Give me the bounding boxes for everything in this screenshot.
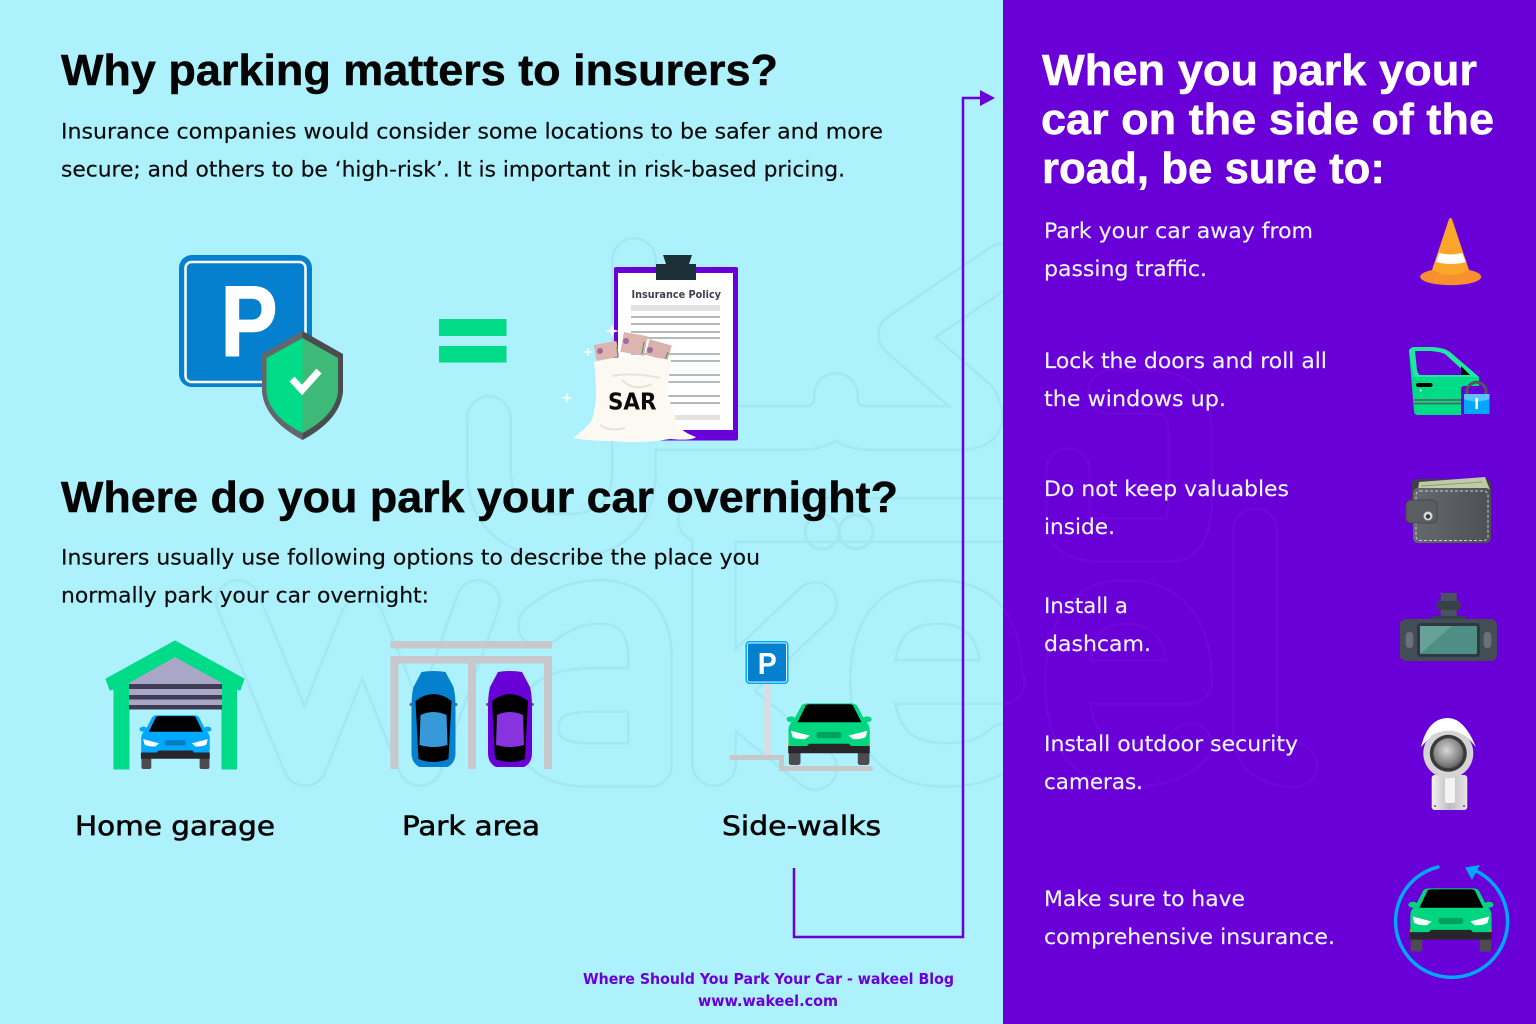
text block: overnight options: normally park your car overnight: (61, 584, 429, 608)
tip: dashcam: dashcam. (1044, 632, 1151, 657)
icon: side-walk parking with sign and green car (732, 641, 872, 768)
tip: no valuables: inside. (1044, 515, 1115, 540)
tip: lock doors: Lock the doors and roll all (1044, 349, 1327, 374)
tip: comprehensive insurance: Make sure to have (1044, 887, 1245, 912)
label: home garage: Home garage (75, 811, 275, 842)
icon: equals sign (439, 319, 506, 362)
footer credit (583, 970, 954, 1010)
icon: parking sign with shield: P (220, 266, 278, 378)
heading: when you park on the side of the road: road, be sure to: (1042, 144, 1385, 193)
left panel background (0, 0, 1003, 1024)
icon: outdoor security camera (1421, 718, 1476, 810)
heading: when you park on the side of the road: When you park your (1042, 46, 1477, 95)
tip: lock doors: the windows up. (1044, 387, 1226, 412)
icon: traffic cone (1420, 218, 1481, 285)
tip: no valuables: Do not keep valuables (1044, 477, 1289, 502)
arrow: from side-walks to right panel (794, 90, 995, 937)
label: side-walks: Side-walks (722, 811, 881, 842)
icon: insurance policy clipboard and SAR money bag (561, 255, 738, 442)
tip: security cameras (1044, 732, 1298, 795)
tip: security cameras: Install outdoor security (1044, 732, 1298, 757)
tip: lock doors (1044, 349, 1327, 412)
icon: green car inside circular arrow (1396, 865, 1508, 977)
icon: park area with two cars (390, 641, 552, 769)
tip: dashcam: Install a (1044, 594, 1128, 619)
tip: security cameras: cameras. (1044, 770, 1143, 795)
tip: park away from traffic: Park your car away from (1044, 219, 1313, 244)
tip: no valuables (1044, 477, 1289, 540)
heading: when you park on the side of the road (1041, 46, 1494, 193)
heading: where do you park: Where do you park your car overnight? (61, 473, 898, 522)
tip: park away from traffic (1044, 219, 1313, 282)
tip: comprehensive insurance (1044, 887, 1335, 950)
text block: overnight options: Insurers usually use following options to describe the place you (61, 546, 760, 570)
icon: car door with padlock (1409, 347, 1490, 416)
icon: home garage with blue car (106, 641, 244, 769)
tip: dashcam (1044, 594, 1151, 657)
footer credit: Where Should You Park Your Car - wakeel Blog (583, 970, 954, 988)
icon: wallet (1406, 477, 1491, 543)
text block: overnight options (61, 546, 760, 608)
heading: when you park on the side of the road: car on the side of the (1041, 95, 1494, 144)
tip: park away from traffic: passing traffic. (1044, 257, 1207, 282)
label: park area: Park area (402, 811, 540, 842)
heading: why parking matters: Why parking matters to insurers? (61, 46, 778, 95)
footer credit: www.wakeel.com (698, 992, 838, 1010)
icon: insurance policy clipboard and SAR money bag: SAR (608, 390, 657, 416)
right panel background (1003, 0, 1536, 1024)
tip: comprehensive insurance: comprehensive insurance. (1044, 925, 1335, 950)
text block: insurer locations (61, 120, 883, 182)
icon: dashcam (1400, 593, 1497, 661)
icon: side-walk parking with sign and green car: P (758, 646, 777, 681)
text block: insurer locations: Insurance companies would consider some locations to be safer and more (61, 120, 883, 144)
icon: insurance policy clipboard and SAR money bag: Insurance Policy (632, 289, 721, 301)
icon: parking sign with shield (179, 255, 343, 440)
text block: insurer locations: secure; and others to be ‘high-risk’. It is important in risk-based pricing. (61, 158, 845, 182)
